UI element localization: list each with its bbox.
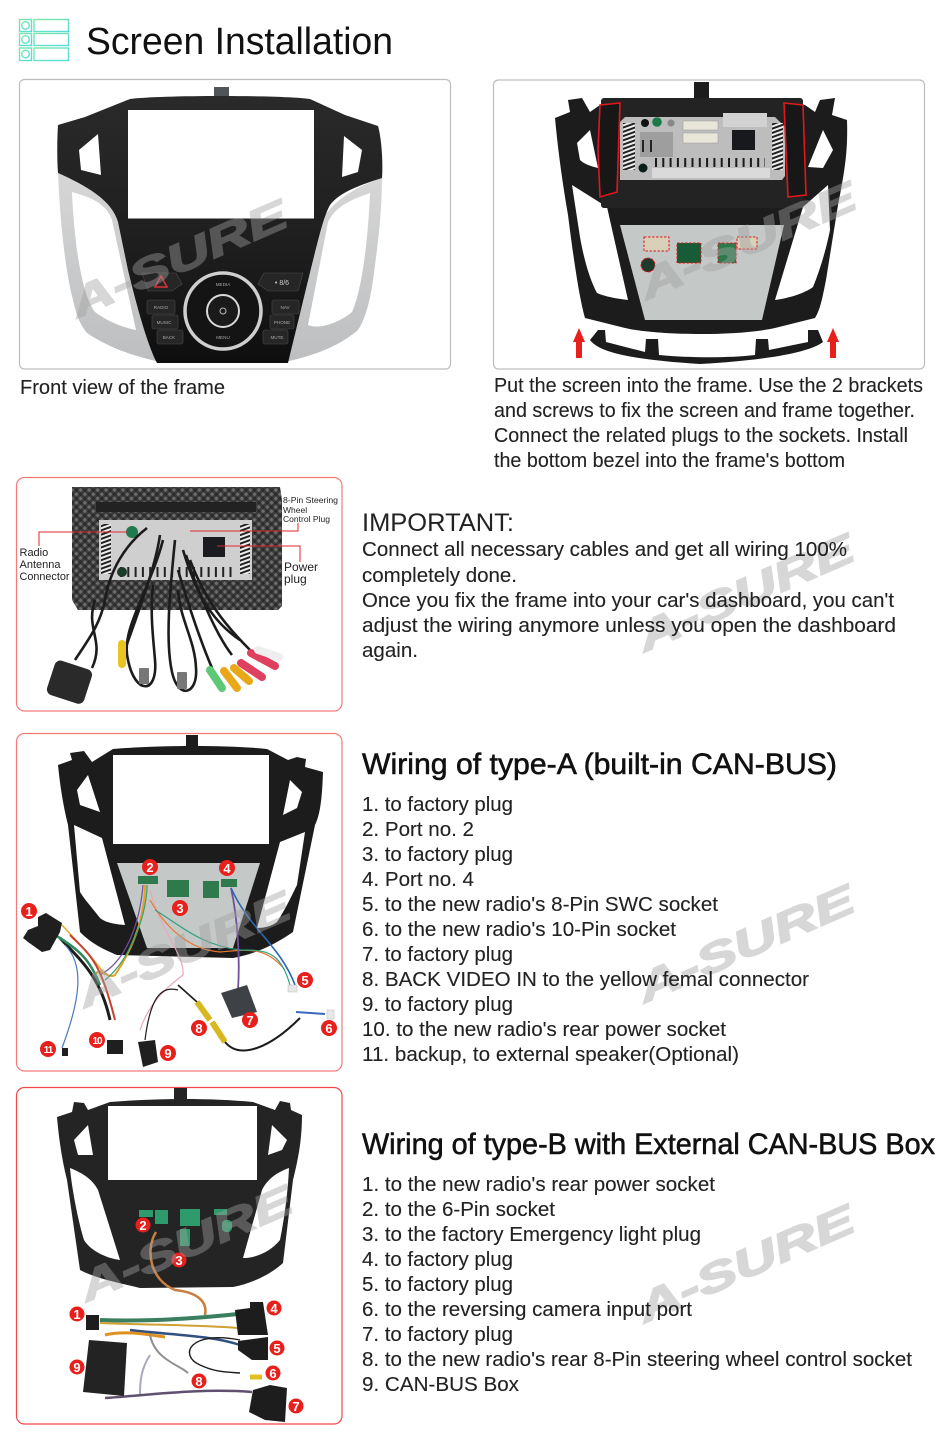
number badges: 9 [164, 1046, 172, 1061]
button labels: RADIO [154, 305, 169, 310]
number badges [70, 1218, 304, 1414]
callout lines [39, 523, 300, 562]
list: type-A wiring: 6. to the new radio's 10-Pin socket [362, 918, 676, 941]
title: Screen Installation [86, 21, 393, 63]
list: type-B wiring: 8. to the new radio's rear 8-Pin steering wheel control socket [362, 1348, 912, 1371]
list: type-B wiring: 6. to the reversing camera input port [362, 1298, 692, 1321]
panel: rear view with brackets [494, 80, 924, 369]
number badges: 9 [73, 1360, 81, 1375]
number badges: 8 [195, 1021, 203, 1036]
number badges: 4 [270, 1301, 278, 1316]
hazard icon [155, 276, 167, 287]
callout labels: Connector [20, 571, 70, 583]
important note: IMPORTANT: [362, 509, 514, 537]
number badges: 5 [273, 1341, 281, 1356]
number badges: 1 [25, 904, 33, 919]
RCA plugs [122, 644, 279, 688]
cables [75, 528, 250, 691]
harness connectors [23, 913, 158, 1067]
number badges: 2 [146, 860, 154, 875]
number badges: 7 [246, 1013, 254, 1028]
watermarks over photos: A-SURE [69, 882, 300, 1017]
CAN-BUS box [83, 1340, 127, 1396]
body text: install steps: Connect the related plugs to the sockets. Install [494, 424, 908, 447]
callout labels: Radio [20, 547, 48, 559]
callout labels: Wheel [283, 505, 307, 515]
list: type-B wiring [362, 1173, 912, 1396]
panel: rear connectors [16, 478, 342, 711]
button labels: BACK [163, 335, 176, 340]
watermarks over photos: A-SURE [62, 190, 296, 327]
panel: front view of the frame [20, 80, 450, 369]
lower silver plate [620, 225, 784, 320]
list: type-A wiring: 1. to factory plug [362, 793, 513, 816]
USB plugs [139, 668, 187, 689]
control buttons [142, 273, 303, 344]
body text: install steps: the bottom bezel into the frame's bottom [494, 449, 845, 472]
wires [100, 1232, 262, 1398]
frame tab [214, 87, 229, 98]
white plugs [288, 985, 334, 1019]
callout labels: Control Plug [283, 514, 330, 524]
callout labels: Power [284, 560, 318, 574]
harness connectors [86, 1302, 287, 1422]
number badges: 2 [139, 1218, 147, 1233]
number badges: 8 [195, 1374, 203, 1389]
connectors outlined in red [641, 237, 757, 272]
list: type-A wiring: 2. Port no. 2 [362, 818, 474, 841]
watermarks behind text column [629, 524, 863, 1332]
list: type-B wiring: 7. to factory plug [362, 1323, 513, 1346]
panel: type-A wiring photo [16, 734, 342, 1071]
list: type-B wiring: 4. to factory plug [362, 1248, 513, 1271]
list: type-A wiring: 5. to the new radio's 8-Pin SWC socket [362, 893, 718, 916]
button labels [154, 280, 290, 340]
watermarks behind text column: A-SURE [629, 875, 863, 1012]
button labels: PHONE [274, 320, 290, 325]
GPS antenna [45, 659, 94, 705]
number badges: 4 [223, 861, 231, 876]
important note: Once you fix the frame into your car's dashboard, you can't [362, 589, 894, 612]
callout labels [20, 495, 338, 586]
list: type-B wiring: 5. to factory plug [362, 1273, 513, 1296]
number badges: 1 [73, 1307, 81, 1322]
button labels: MUSIC [157, 320, 172, 325]
control knob: MEDIA [216, 282, 231, 287]
frame [58, 746, 323, 958]
list: type-B wiring: 1. to the new radio's rear power socket [362, 1173, 715, 1196]
red brackets [598, 103, 806, 197]
watermarks over photos: A-SURE [631, 172, 865, 309]
important note: completely done. [362, 564, 517, 587]
silver chassis [620, 113, 785, 180]
heading: type-B wiring: Wiring of type-B with External CAN-BUS Box [362, 1128, 935, 1161]
button labels: NAV [280, 305, 290, 310]
top tab [186, 735, 198, 749]
top tab [694, 82, 709, 100]
list: type-A wiring: 7. to factory plug [362, 943, 513, 966]
wires [55, 885, 325, 1050]
red arrows [573, 328, 839, 358]
frame [57, 1099, 302, 1288]
list: type-A wiring: 3. to factory plug [362, 843, 513, 866]
silver windows and air vents [72, 134, 370, 330]
heading: type-A wiring: Wiring of type-A (built-in CAN-BUS) [362, 748, 837, 781]
control knob [183, 271, 263, 351]
button labels: MUTE [270, 335, 284, 340]
back of frame [555, 98, 847, 334]
chassis [99, 520, 252, 580]
port 7 connector [221, 985, 257, 1018]
list: type-A wiring: 11. backup, to external speaker(Optional) [362, 1043, 739, 1066]
number badges: 3 [175, 1253, 183, 1268]
number badges: 6 [325, 1021, 333, 1036]
important note [362, 509, 896, 662]
yellow video plug [197, 1002, 225, 1042]
bottom bezel [590, 330, 823, 364]
body text: install steps: Put the screen into the frame. Use the 2 brackets [494, 374, 923, 397]
screen unit [601, 98, 803, 208]
button labels: • 8/6 [275, 280, 289, 287]
important note: Connect all necessary cables and get all wiring 100% [362, 538, 847, 561]
control knob: MENU [216, 335, 230, 340]
body text: install steps: and screws to fix the screen and frame together. [494, 399, 915, 422]
list: type-A wiring: 10. to the new radio's rear power socket [362, 1018, 726, 1041]
carbon back cover [72, 487, 282, 610]
body text: install steps [494, 374, 923, 472]
list: type-B wiring: 3. to the factory Emergency light plug [362, 1223, 701, 1246]
watermarks behind text column: A-SURE [629, 1195, 863, 1332]
list: type-B wiring: 2. to the 6-Pin socket [362, 1198, 555, 1221]
top tab [174, 1088, 187, 1102]
number badges [21, 859, 337, 1061]
watermarks over photos: A-SURE [71, 1176, 302, 1311]
number badges: 10 [92, 1036, 103, 1047]
panel: type-B wiring photo [16, 1088, 342, 1424]
number badges: 11 [44, 1045, 54, 1056]
important note: adjust the wiring anymore unless you open the dashboard [362, 614, 896, 637]
callout labels: plug [284, 572, 307, 586]
list: type-A wiring [362, 793, 809, 1066]
silver trim [58, 173, 382, 362]
list: type-A wiring: 9. to factory plug [362, 993, 513, 1016]
important note: again. [362, 639, 418, 662]
number badges: 6 [269, 1366, 277, 1381]
number badges: 5 [301, 973, 309, 988]
callout labels: Antenna [20, 559, 61, 571]
number badges: 3 [176, 901, 184, 916]
watermarks over photos [62, 172, 865, 1311]
metal plate [117, 863, 260, 948]
list: type-A wiring: 4. Port no. 4 [362, 868, 474, 891]
list: type-A wiring: 8. BACK VIDEO IN to the yellow femal connector [362, 968, 809, 991]
watermarks behind text column: A-SURE [629, 524, 863, 661]
screen opening [128, 110, 314, 218]
callout labels: 8-Pin Steering [283, 495, 338, 505]
icon: header list [20, 20, 68, 60]
black fascia [57, 96, 382, 363]
green boards [138, 876, 237, 898]
number badges: 7 [292, 1399, 300, 1414]
caption: front view: Front view of the frame [20, 376, 225, 399]
list: type-B wiring: 9. CAN-BUS Box [362, 1373, 520, 1396]
green connectors [139, 1209, 232, 1246]
